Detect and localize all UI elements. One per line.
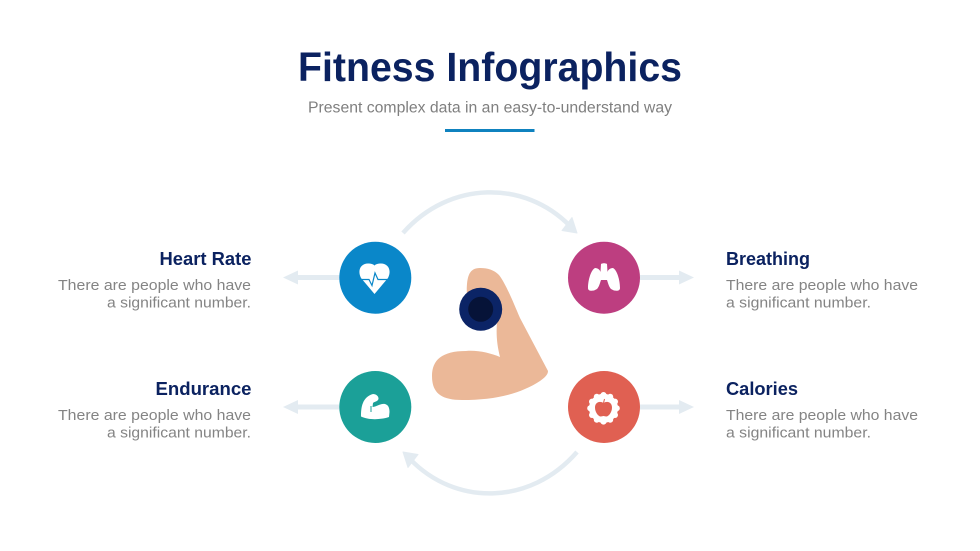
text block: endurance xyxy=(58,379,252,442)
arrow: calories outward xyxy=(640,400,694,414)
text block: breathing: Breathing xyxy=(726,249,810,269)
text block: heart rate: a significant number. xyxy=(107,294,251,312)
text block: breathing: There are people who have xyxy=(726,277,918,294)
subtitle: Present complex data in an easy-to-understand way xyxy=(308,100,672,116)
text block: breathing xyxy=(726,249,918,312)
icon: muscle xyxy=(339,371,411,443)
text block: calories xyxy=(726,379,918,442)
title: Fitness Infographics xyxy=(298,44,682,90)
text block: endurance: a significant number. xyxy=(107,424,251,442)
text block: calories: a significant number. xyxy=(726,424,871,442)
text block: calories: Calories xyxy=(726,379,798,399)
arrow: top curved arrow xyxy=(403,192,577,233)
text block: calories: There are people who have xyxy=(726,407,918,424)
text block: heart rate: Heart Rate xyxy=(160,249,252,269)
dumbbell xyxy=(459,288,502,331)
text block: endurance: Endurance xyxy=(156,379,252,399)
arrow: breathing outward xyxy=(640,270,694,284)
arrow: bottom curved arrow xyxy=(403,452,577,493)
arrow: endurance outward xyxy=(283,400,340,414)
text block: breathing: a significant number. xyxy=(726,294,871,312)
icon: apple calories xyxy=(568,371,640,443)
text block: heart rate: There are people who have xyxy=(58,277,251,294)
text block: endurance: There are people who have xyxy=(58,407,251,424)
icon: central flexed arm with dumbbell xyxy=(432,268,548,400)
arrow: heart rate outward xyxy=(283,270,340,284)
arm xyxy=(432,268,548,400)
icon: heart rate xyxy=(339,242,411,314)
title underline xyxy=(445,129,534,132)
text block: heart rate xyxy=(58,249,252,312)
icon: lungs xyxy=(568,242,640,314)
